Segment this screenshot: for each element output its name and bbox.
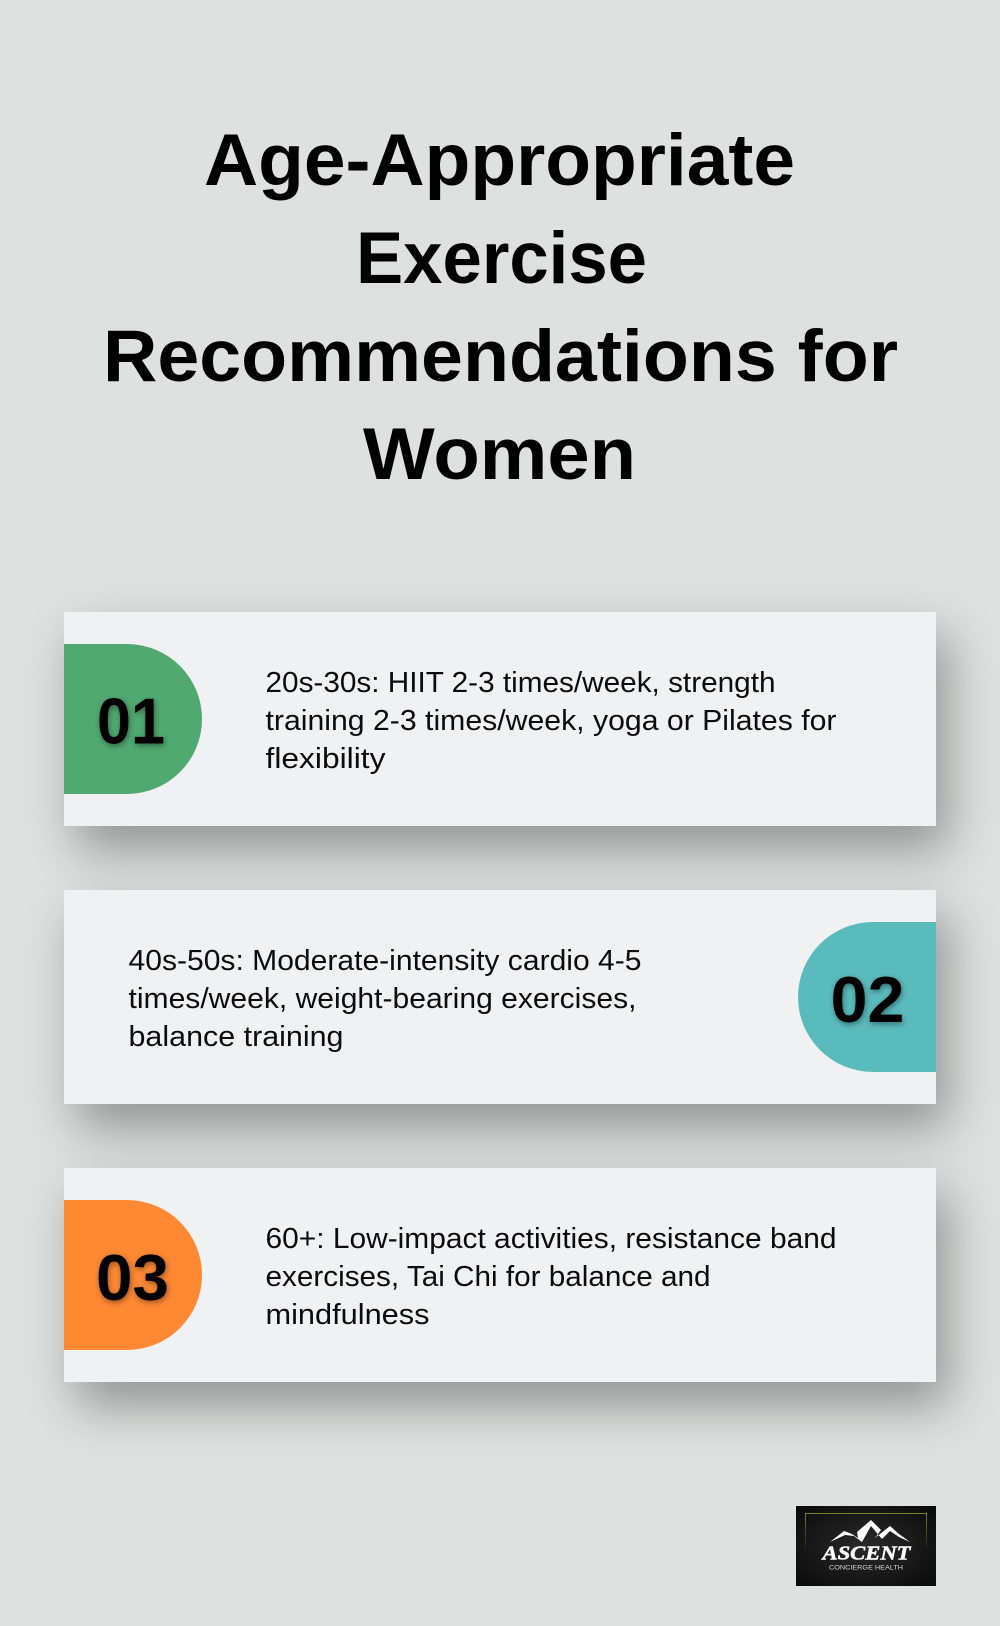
title: Age-Appropriate bbox=[204, 120, 795, 201]
text: 60+ exercises: exercises, Tai Chi for balance and bbox=[266, 1261, 710, 1293]
text: 60+ exercises: mindfulness bbox=[266, 1299, 430, 1331]
text: 40s-50s exercises: times/week, weight-bearing exercises, bbox=[128, 983, 636, 1015]
text: 40s-50s exercises: 40s-50s: Moderate-intensity cardio 4-5 bbox=[128, 945, 642, 977]
number badge 02 bbox=[798, 922, 936, 1072]
number badge 03: 03 bbox=[96, 1241, 169, 1314]
panel: 20s-30s recommendation bbox=[64, 612, 936, 826]
logo: Ascent Concierge Health bbox=[796, 1506, 936, 1586]
title: Recommendations for bbox=[103, 316, 898, 397]
logo: Ascent Concierge Health: ASCENT bbox=[820, 1542, 911, 1564]
title: Women bbox=[363, 414, 636, 495]
icon: mountains bbox=[830, 1520, 910, 1542]
title: Exercise bbox=[356, 218, 647, 299]
text: 60+ exercises bbox=[266, 1223, 836, 1331]
text: 40s-50s exercises: balance training bbox=[128, 1021, 344, 1053]
title bbox=[103, 120, 898, 495]
text: 60+ exercises: 60+: Low-impact activities, resistance band bbox=[266, 1223, 836, 1255]
number badge 02: 02 bbox=[830, 963, 904, 1036]
text: 20s-30s exercises bbox=[266, 667, 837, 775]
text: 40s-50s exercises bbox=[128, 945, 642, 1053]
panel: 40s-50s recommendation bbox=[64, 890, 936, 1104]
number badge 03 bbox=[64, 1200, 202, 1350]
number badge 01 bbox=[64, 644, 202, 794]
text: 20s-30s exercises: 20s-30s: HIIT 2-3 times/week, strength bbox=[266, 667, 776, 699]
logo: Ascent Concierge Health: CONCIERGE HEALTH bbox=[829, 1564, 903, 1572]
text: 20s-30s exercises: flexibility bbox=[266, 743, 386, 775]
number badge 01: 01 bbox=[97, 684, 165, 758]
panel: 60+ recommendation bbox=[64, 1168, 936, 1382]
text: 20s-30s exercises: training 2-3 times/week, yoga or Pilates for bbox=[266, 705, 837, 737]
